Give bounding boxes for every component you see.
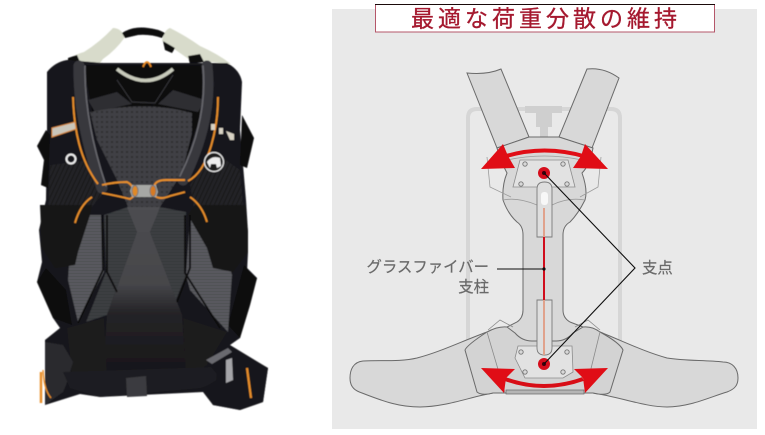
reflective patches xyxy=(52,122,234,140)
yoke wing outline xyxy=(487,156,601,205)
right shoulder strap xyxy=(559,69,619,148)
roll top closure xyxy=(66,28,231,66)
label: fiberglass support xyxy=(366,258,489,296)
label: pivot: 支点 xyxy=(642,259,673,277)
pack body xyxy=(37,60,268,410)
hip pad inner lines xyxy=(487,320,600,393)
side fabric panels xyxy=(48,150,244,215)
lower load arrow xyxy=(481,368,608,393)
hip wings xyxy=(350,332,738,407)
diagram panel xyxy=(332,9,757,429)
logo patches xyxy=(66,152,224,172)
pivot leader lines xyxy=(544,173,635,364)
side pockets xyxy=(40,205,248,272)
title box xyxy=(375,4,715,32)
label: fiberglass support: 支柱 xyxy=(458,278,489,296)
sternum buckle xyxy=(130,185,158,197)
upper plate xyxy=(513,160,575,187)
orange top loop xyxy=(143,62,151,67)
label: fiberglass support: グラスファイバー xyxy=(366,258,489,276)
orange cords xyxy=(41,97,251,403)
hip pad xyxy=(465,327,623,394)
shoulder straps xyxy=(79,66,208,188)
lower pivot xyxy=(538,358,550,370)
upper load arrow xyxy=(481,144,608,169)
upper pivot xyxy=(538,167,550,179)
title: 最適な荷重分散の維持 xyxy=(411,6,681,32)
top handle xyxy=(525,106,562,138)
left shoulder strap xyxy=(467,69,529,148)
lower sleeve xyxy=(537,300,552,355)
lumbar bar xyxy=(506,390,584,394)
hip belt xyxy=(45,342,268,410)
shoulder mesh xyxy=(88,75,205,112)
lower back side panels xyxy=(68,207,232,332)
lower plate xyxy=(515,346,573,378)
central hourglass mesh xyxy=(103,207,186,378)
fiberglass rod xyxy=(543,208,545,355)
rod leader line xyxy=(497,267,546,271)
side straps xyxy=(37,115,257,338)
lumbar pad xyxy=(67,318,227,380)
pack frame outline xyxy=(468,109,620,345)
sleeve highlight xyxy=(541,192,548,205)
central mesh panel xyxy=(90,106,192,207)
hip belt buckle xyxy=(126,376,147,397)
diagram artwork xyxy=(350,69,738,407)
backpack photo xyxy=(37,28,268,410)
upper sleeve xyxy=(537,182,552,237)
aluminium frame stays xyxy=(78,215,220,328)
upper back panel xyxy=(84,65,208,185)
diagram harness xyxy=(350,69,738,407)
neck collar xyxy=(117,69,173,80)
yoke and spine xyxy=(497,137,593,341)
